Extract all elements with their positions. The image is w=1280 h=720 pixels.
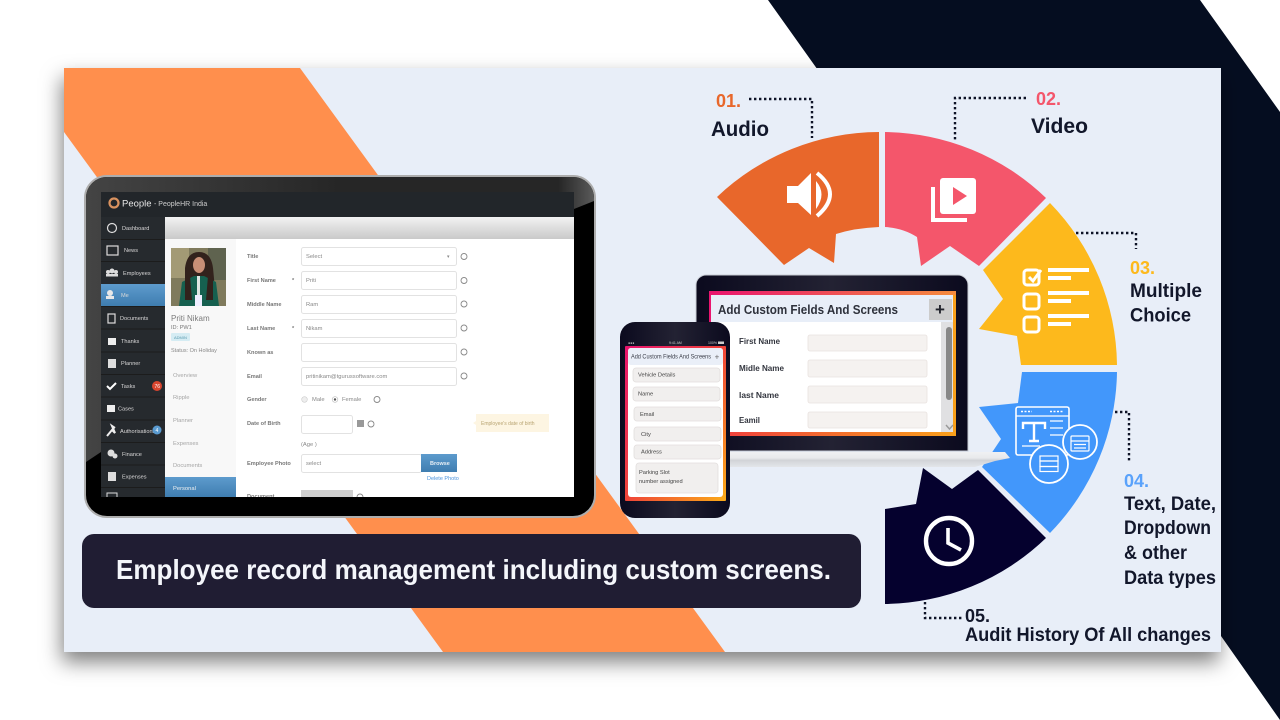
phone status bar (628, 341, 724, 345)
phone form fields: Vehicle Details (638, 372, 675, 378)
sidebar navigation: Dashboard (122, 226, 149, 232)
employee form: Known as (247, 350, 273, 356)
profile column: Status: On Holiday (171, 348, 217, 354)
profile column: Planner (173, 418, 193, 424)
icon: checklist (1024, 270, 1089, 332)
employee form: pritinikam@tgurussoftware.com (306, 374, 387, 380)
employee form: Select (306, 254, 323, 260)
phone mockup (620, 322, 730, 518)
segment 05: audit history (885, 468, 1046, 604)
laptop screen header (711, 295, 953, 322)
profile column: Documents (173, 463, 202, 469)
employee form: Title (247, 254, 258, 260)
sidebar navigation: 76 (154, 384, 160, 390)
sidebar navigation: Tasks (121, 384, 136, 390)
date of birth tooltip (473, 414, 549, 432)
sidebar navigation: Documents (120, 316, 148, 322)
laptop form fields: First Name (739, 336, 780, 346)
employee form: Female (342, 397, 361, 403)
profile column: Overview (173, 373, 198, 379)
phone header: + (715, 352, 720, 362)
laptop form fields (739, 335, 927, 428)
tablet screen (101, 192, 574, 500)
employee form: Delete Photo (427, 476, 459, 482)
employee form: First Name (247, 278, 276, 284)
label 01 audio: 01. (716, 91, 741, 111)
segment 01: audio (717, 132, 879, 265)
main panel (64, 68, 1221, 652)
label 05 audit history (925, 602, 1211, 646)
label 05 audit history: Audit History Of All changes (965, 624, 1211, 646)
icon: clock (926, 518, 972, 564)
icon: form window with calendar and database (1016, 407, 1097, 483)
sidebar navigation: Planner (121, 361, 140, 367)
tablet mockup (85, 176, 595, 517)
employee form: Email (247, 374, 262, 380)
date of birth tooltip: Employee's date of birth (481, 421, 535, 427)
label 03 multiple choice: 03. (1130, 258, 1155, 278)
phone status bar: ●●● (628, 341, 634, 345)
phone form fields: Address (641, 450, 662, 456)
employee form: ▾ (447, 254, 450, 260)
laptop screen frame (709, 291, 956, 436)
profile column: Personal (173, 486, 196, 492)
phone status bar: 9:41 AM (669, 341, 682, 345)
laptop base (726, 452, 1010, 467)
laptop form fields: Midle Name (739, 363, 784, 373)
employee form (247, 248, 467, 500)
profile column: ADMIN (174, 335, 187, 340)
label 01 audio: Audio (711, 118, 769, 141)
label 04 data types (1115, 412, 1216, 589)
employee form: select (306, 461, 322, 467)
profile column: ID: PW1 (171, 325, 192, 331)
caption bar: Employee record management including custom screens. (116, 554, 831, 585)
sidebar navigation: Thanks (121, 339, 140, 345)
phone form fields: number assigned (639, 479, 683, 485)
label 05 audit history: 05. (965, 606, 990, 626)
laptop form fields: last Name (739, 390, 779, 400)
sidebar navigation: Finance (122, 452, 142, 458)
caption bar (82, 534, 861, 608)
segment 03: multiple choice (979, 203, 1117, 365)
phone form fields (633, 368, 721, 493)
sidebar navigation: News (124, 248, 138, 254)
employee form: Middle Name (247, 302, 282, 308)
phone form fields: Parking Slot (639, 470, 670, 476)
employee form: Browse (430, 461, 450, 467)
employee form: Document (247, 494, 274, 500)
icon: video library (933, 178, 976, 220)
sidebar navigation: Authorisations (120, 429, 156, 435)
phone header: Add Custom Fields And Screens (631, 354, 711, 360)
profile column: Ripple (173, 395, 189, 401)
phone form fields: Name (638, 392, 653, 398)
label 04 data types: Dropdown (1124, 517, 1211, 539)
profile column (165, 239, 236, 497)
employee form: Gender (247, 397, 267, 403)
sidebar navigation: 4 (156, 428, 158, 434)
employee form: Ram (306, 302, 318, 308)
label 03 multiple choice (1076, 233, 1202, 326)
employee form: * (292, 278, 295, 284)
label 02 video: 02. (1036, 89, 1061, 109)
profile column: Priti Nikam (171, 314, 210, 323)
label 03 multiple choice: Multiple (1130, 280, 1202, 302)
label 04 data types: & other (1124, 542, 1187, 564)
sidebar navigation (101, 217, 165, 499)
employee form: Male (312, 397, 325, 403)
app logo and title: - PeopleHR India (154, 201, 207, 208)
employee form: Last Name (247, 326, 275, 332)
employee form: Priti (306, 278, 316, 284)
employee form: (Age ) (301, 442, 317, 448)
profile column: Expenses (173, 441, 199, 447)
sidebar navigation: Employees (123, 271, 151, 277)
phone form fields: City (641, 432, 651, 438)
label 04 data types: Data types (1124, 567, 1216, 589)
label 02 video (955, 89, 1088, 142)
segment 02: video (885, 132, 1046, 266)
phone header (628, 348, 723, 365)
employee form: Nikam (306, 326, 323, 332)
label 02 video: Video (1031, 115, 1088, 138)
app logo and title (110, 198, 207, 210)
icon: speaker (787, 173, 830, 216)
laptop form fields: Eamil (739, 415, 760, 425)
dark navy background shape (768, 0, 1280, 720)
segment 04: data types (979, 372, 1117, 533)
phone status bar: 100% (708, 341, 717, 345)
app logo and title: People (122, 198, 152, 210)
sidebar navigation: Me (121, 293, 129, 299)
employee form: Employee Photo (247, 461, 291, 467)
laptop screen header: + (935, 300, 945, 319)
orange diagonal stripe (64, 68, 725, 652)
laptop scrollbar (941, 322, 953, 432)
label 04 data types: 04. (1124, 471, 1149, 491)
label 03 multiple choice: Choice (1130, 304, 1191, 326)
sidebar navigation: Cases (118, 406, 134, 412)
employee form: Date of Birth (247, 421, 281, 427)
employee photo (171, 248, 226, 306)
laptop screen header: Add Custom Fields And Screens (718, 303, 898, 317)
laptop mockup (696, 275, 1010, 467)
sidebar navigation: Expenses (122, 474, 147, 480)
employee form: * (292, 326, 295, 332)
label 01 audio (711, 91, 812, 141)
phone form fields: Email (640, 412, 654, 418)
label 04 data types: Text, Date, (1124, 493, 1216, 515)
